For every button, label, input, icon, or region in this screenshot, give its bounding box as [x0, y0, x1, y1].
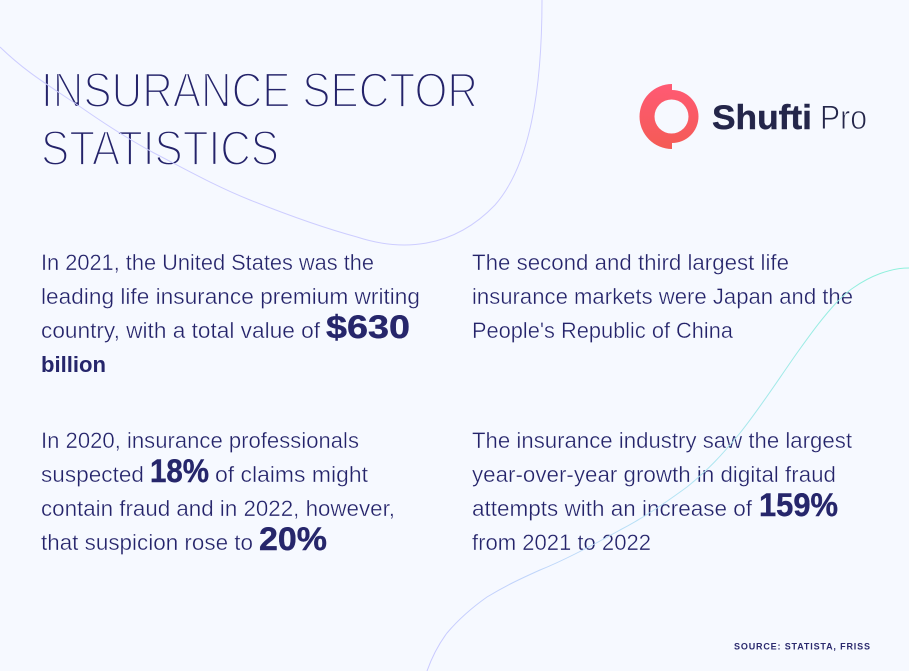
text block: US premium: In 2021, the United States was the [41, 250, 374, 275]
icon: logo ring [640, 84, 698, 149]
title: INSURANCE SECTOR [41, 64, 478, 118]
text block: suspected fraud: 18% [150, 453, 209, 489]
text block: Japan and China: insurance markets were Japan and the [472, 284, 853, 309]
text block: US premium: billion [41, 352, 106, 377]
text block: suspected fraud: contain fraud and in 2022, however, [41, 496, 395, 521]
text block: digital fraud growth: year-over-year growth in digital fraud [472, 462, 836, 487]
text block: suspected fraud: In 2020, insurance professionals [41, 428, 359, 453]
curve: purple [0, 0, 542, 245]
text block: Japan and China [472, 250, 853, 343]
logo: Shufti Pro [640, 84, 867, 149]
title [41, 64, 478, 176]
text block: digital fraud growth: The insurance industry saw the largest [472, 428, 852, 453]
text block: digital fraud growth: from 2021 to 2022 [472, 530, 651, 555]
text block: digital fraud growth: attempts with an increase of [472, 496, 753, 521]
text block: US premium [41, 250, 420, 377]
text block: US premium: country, with a total value of [41, 318, 321, 343]
text block: Japan and China: People's Republic of China [472, 318, 734, 343]
logo wordmark: Shufti [712, 99, 812, 137]
curve: teal to purple [427, 268, 909, 671]
text block: digital fraud growth [472, 428, 852, 555]
logo wordmark: Pro [820, 99, 867, 137]
text block: Japan and China: The second and third largest life [472, 250, 789, 275]
text block: suspected fraud: suspected [41, 462, 144, 487]
text block: suspected fraud: that suspicion rose to [41, 530, 253, 555]
source note: SOURCE: STATISTA, FRISS [734, 642, 870, 652]
title: STATISTICS [41, 122, 279, 176]
text block: suspected fraud: of claims might [215, 462, 368, 487]
text block: US premium: $630 [326, 309, 410, 345]
text block: digital fraud growth: 159% [759, 487, 838, 523]
text block: suspected fraud [41, 428, 395, 557]
logo wordmark [712, 99, 867, 137]
text block: US premium: leading life insurance premium writing [41, 284, 420, 309]
text block: suspected fraud: 20% [259, 521, 327, 557]
